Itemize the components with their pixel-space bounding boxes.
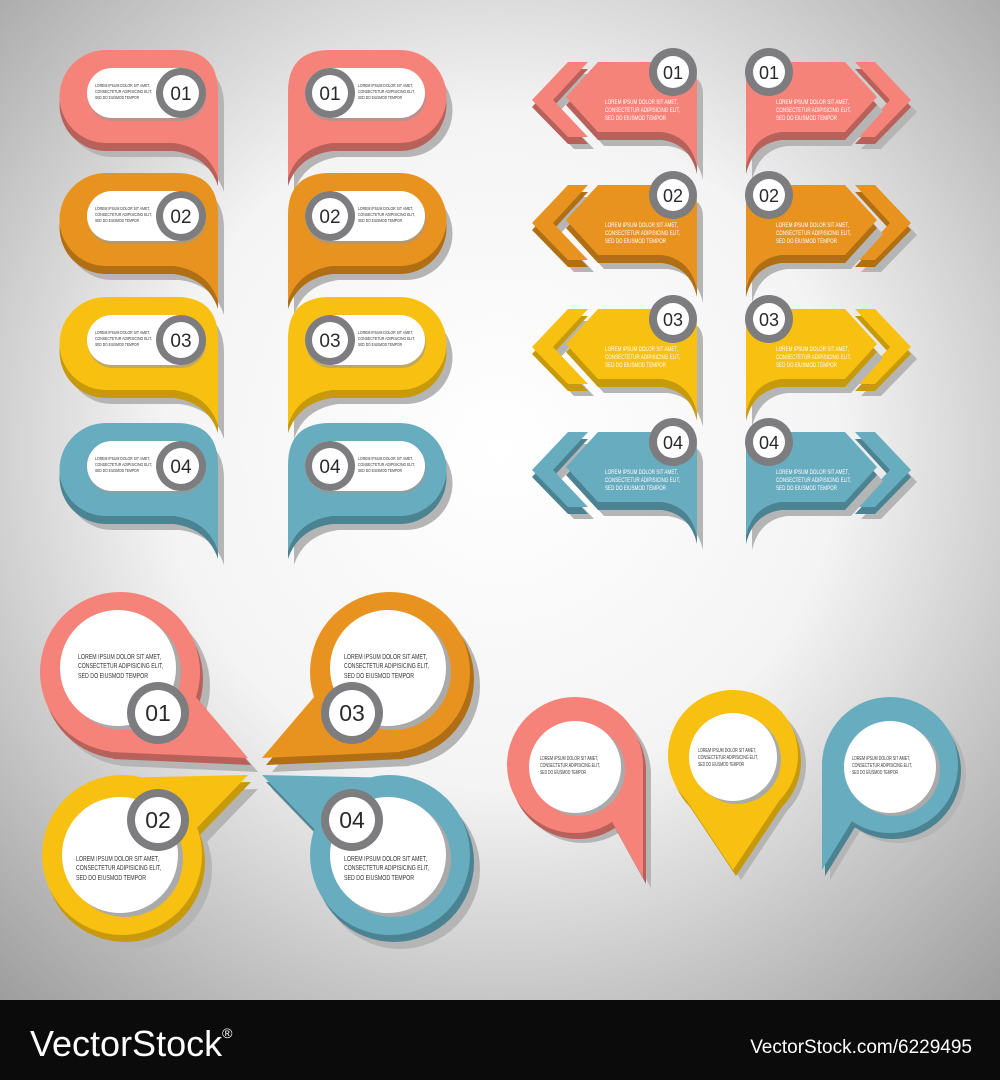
pills, numbers, text for bubbles: CONSECTETUR ADIPISICING ELIT, [358,336,415,341]
pills, numbers, text for bubbles: CONSECTETUR ADIPISICING ELIT, [358,462,415,467]
arrow number badges and text: SED DO EIUSMOD TEMPOR [605,362,666,369]
pin yellow: LOREM IPSUM DOLOR SIT AMET, [698,748,756,754]
arrow row 03 [532,309,917,427]
pills, numbers, text for bubbles: LOREM IPSUM DOLOR SIT AMET, [95,456,150,461]
panel: left speech bubbles [60,50,453,565]
arrow number badges and text: 01 [759,63,779,83]
pills, numbers, text for bubbles: CONSECTETUR ADIPISICING ELIT, [95,212,152,217]
arrow number badges and text: LOREM IPSUM DOLOR SIT AMET, [605,469,678,476]
pills, numbers, text for bubbles: SED DO EIUSMOD TEMPOR [358,218,403,223]
pills, numbers, text for bubbles: LOREM IPSUM DOLOR SIT AMET, [95,330,150,335]
pills, numbers, text for bubbles: LOREM IPSUM DOLOR SIT AMET, [95,206,150,211]
arrow number badges and text: 02 [663,186,683,206]
arrow row 01 [532,62,917,180]
pills, numbers, text for bubbles: CONSECTETUR ADIPISICING ELIT, [95,462,152,467]
arrow number badges and text: LOREM IPSUM DOLOR SIT AMET, [776,346,849,353]
pin yellow: SED DO EIUSMOD TEMPOR [698,762,744,768]
pills, numbers, text for bubbles: CONSECTETUR ADIPISICING ELIT, [358,212,415,217]
pills, numbers, text for bubbles: 04 [170,457,192,478]
bubble 03 right [288,297,452,439]
pin blue: SED DO EIUSMOD TEMPOR [852,770,898,776]
arrow number badges and text: SED DO EIUSMOD TEMPOR [605,238,666,245]
footer logo: ® [222,1025,233,1041]
pills, numbers, text for bubbles: CONSECTETUR ADIPISICING ELIT, [95,336,152,341]
arrow number badges and text: LOREM IPSUM DOLOR SIT AMET, [605,99,678,106]
pills, numbers, text for bubbles: LOREM IPSUM DOLOR SIT AMET, [358,330,413,335]
panel: location pins [507,690,966,888]
panel: four-leaf circles [40,592,480,949]
arrow number badges and text: LOREM IPSUM DOLOR SIT AMET, [605,222,678,229]
pin salmon [507,697,651,888]
pin salmon: SED DO EIUSMOD TEMPOR [540,770,586,776]
arrow number badges and text: CONSECTETUR ADIPISICING ELIT, [776,230,851,237]
arrow number badges and text: CONSECTETUR ADIPISICING ELIT, [605,477,680,484]
pills, numbers, text for bubbles: SED DO EIUSMOD TEMPOR [358,468,403,473]
pills, numbers, text for bubbles: SED DO EIUSMOD TEMPOR [95,218,140,223]
arrow number badges and text: SED DO EIUSMOD TEMPOR [776,115,837,122]
arrow number badges and text: CONSECTETUR ADIPISICING ELIT, [776,354,851,361]
arrow number badges and text: CONSECTETUR ADIPISICING ELIT, [776,107,851,114]
leaf 02 yellow [42,775,258,949]
pills, numbers, text for bubbles: LOREM IPSUM DOLOR SIT AMET, [358,206,413,211]
pills, numbers, text for bubbles: LOREM IPSUM DOLOR SIT AMET, [95,83,150,88]
footer bar [0,1000,1000,1080]
bubble 03 left [60,297,224,439]
pills, numbers, text for bubbles: 03 [170,331,192,352]
pills, numbers, text for bubbles: LOREM IPSUM DOLOR SIT AMET, [358,83,413,88]
leaf number badges and text: LOREM IPSUM DOLOR SIT AMET, [344,856,427,863]
arrow number badges and text: CONSECTETUR ADIPISICING ELIT, [605,107,680,114]
leaf number badges and text: 02 [145,807,171,833]
leaf number badges and text: 01 [145,700,171,726]
leaf number badges and text: SED DO EIUSMOD TEMPOR [344,875,414,882]
bubble 04 right [288,423,452,565]
pills, numbers, text for bubbles: CONSECTETUR ADIPISICING ELIT, [95,89,152,94]
pills, numbers, text for bubbles: SED DO EIUSMOD TEMPOR [358,342,403,347]
leaf number badges and text: CONSECTETUR ADIPISICING ELIT, [76,865,161,872]
leaf number badges and text: CONSECTETUR ADIPISICING ELIT, [344,865,429,872]
leaf 04 blue [262,775,480,949]
bubble 01 right [288,50,452,192]
bubble 02 right [288,173,452,315]
pin blue: LOREM IPSUM DOLOR SIT AMET, [852,756,910,762]
leaf number badges and text: SED DO EIUSMOD TEMPOR [344,673,414,680]
pin blue [822,697,966,880]
arrow number badges and text: 04 [759,433,779,453]
pin salmon: CONSECTETUR ADIPISICING ELIT, [540,763,600,769]
bubble 01 left [60,50,224,192]
arrow number badges and text: SED DO EIUSMOD TEMPOR [605,485,666,492]
pills, numbers, text for bubbles: SED DO EIUSMOD TEMPOR [358,95,403,100]
arrow number badges and text: 01 [663,63,683,83]
pin salmon: LOREM IPSUM DOLOR SIT AMET, [540,756,598,762]
leaf number badges and text: 04 [339,807,365,833]
leaf 01 salmon [40,592,258,772]
footer logo: VectorStock [30,1023,222,1064]
arrow number badges and text: 03 [663,310,683,330]
pills, numbers, text for bubbles: LOREM IPSUM DOLOR SIT AMET, [358,456,413,461]
pills, numbers, text for bubbles [87,68,426,494]
arrow number badges and text: SED DO EIUSMOD TEMPOR [776,485,837,492]
pills, numbers, text for bubbles: 02 [319,207,341,228]
pin blue: CONSECTETUR ADIPISICING ELIT, [852,763,912,769]
arrow number badges and text: LOREM IPSUM DOLOR SIT AMET, [776,222,849,229]
footer url: VectorStock.com/6229495 [750,1037,972,1058]
leaf number badges and text: LOREM IPSUM DOLOR SIT AMET, [76,856,159,863]
arrow number badges and text: 04 [663,433,683,453]
arrow number badges and text: LOREM IPSUM DOLOR SIT AMET, [776,99,849,106]
arrow number badges and text: SED DO EIUSMOD TEMPOR [776,238,837,245]
leaf number badges and text [76,654,429,882]
arrow row 04 [532,432,917,550]
pin yellow [668,690,806,880]
leaf 03 orange [262,592,480,772]
arrow number badges and text: LOREM IPSUM DOLOR SIT AMET, [605,346,678,353]
arrow number badges and text: LOREM IPSUM DOLOR SIT AMET, [776,469,849,476]
leaf number badges and text: LOREM IPSUM DOLOR SIT AMET, [78,654,161,661]
pills, numbers, text for bubbles: SED DO EIUSMOD TEMPOR [95,342,140,347]
leaf number badges and text: LOREM IPSUM DOLOR SIT AMET, [344,654,427,661]
pills, numbers, text for bubbles: 03 [319,331,341,352]
arrow row 02 [532,185,917,303]
pills, numbers, text for bubbles: CONSECTETUR ADIPISICING ELIT, [358,89,415,94]
pills, numbers, text for bubbles: SED DO EIUSMOD TEMPOR [95,95,140,100]
arrow number badges and text: SED DO EIUSMOD TEMPOR [605,115,666,122]
pills, numbers, text for bubbles: 01 [319,84,341,105]
bubble 04 left [60,423,224,565]
arrow number badges and text: SED DO EIUSMOD TEMPOR [776,362,837,369]
arrow number badges and text: CONSECTETUR ADIPISICING ELIT, [776,477,851,484]
pills, numbers, text for bubbles: 02 [170,207,192,228]
pills, numbers, text for bubbles: 01 [170,84,192,105]
arrow number badges and text: 03 [759,310,779,330]
leaf number badges and text: SED DO EIUSMOD TEMPOR [78,673,148,680]
leaf number badges and text: 03 [339,700,365,726]
leaf number badges and text: SED DO EIUSMOD TEMPOR [76,875,146,882]
bubble 02 left [60,173,224,315]
pills, numbers, text for bubbles: SED DO EIUSMOD TEMPOR [95,468,140,473]
pills, numbers, text for bubbles: 04 [319,457,341,478]
arrow number badges and text [605,48,851,492]
arrow number badges and text: 02 [759,186,779,206]
arrow number badges and text: CONSECTETUR ADIPISICING ELIT, [605,230,680,237]
leaf number badges and text: CONSECTETUR ADIPISICING ELIT, [78,663,163,670]
arrow number badges and text: CONSECTETUR ADIPISICING ELIT, [605,354,680,361]
leaf number badges and text: CONSECTETUR ADIPISICING ELIT, [344,663,429,670]
panel: arrow banners [532,48,917,550]
pin yellow: CONSECTETUR ADIPISICING ELIT, [698,755,758,761]
